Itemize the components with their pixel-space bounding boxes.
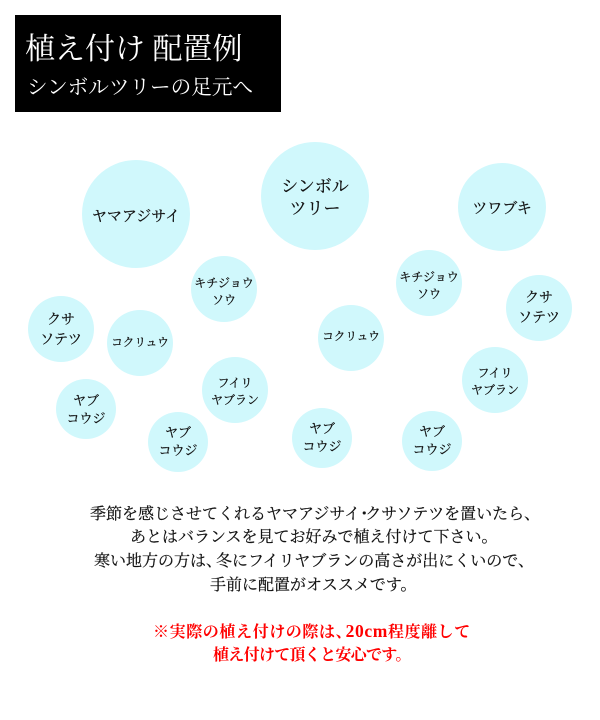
- circle: ヤブコウジ 2: ヤブ: [165, 425, 191, 440]
- heading: 植え付け 配置例: [25, 33, 242, 66]
- description text: 季節を感じさせてくれるヤマアジサイ・クサソテツを置いたら、: [90, 506, 540, 523]
- circle: フイリヤブラン right: フイリ: [478, 366, 512, 380]
- circle: コクリュウ center: [318, 305, 384, 371]
- warning note: 植え付けて頂くと安心です。: [213, 647, 411, 664]
- title block: [15, 15, 281, 112]
- circle: ヤマアジサイ: [82, 160, 190, 268]
- warning note: ※実際の植え付けの際は、20cm程度離して: [153, 621, 471, 641]
- warning note: [153, 621, 471, 664]
- description text: 寒い地方の方は、冬にフイリヤブランの高さが出にくいので、: [94, 553, 534, 570]
- circle: ツワブキ: [458, 163, 546, 251]
- circle: クサソテツ right: ソテツ: [518, 311, 560, 326]
- circle: ヤブコウジ 2: コウジ: [158, 443, 198, 458]
- circle: ヤブコウジ 3: ヤブ: [309, 421, 335, 436]
- description text: あとはバランスを見てお好みで植え付けて下さい。: [130, 529, 498, 546]
- planting layout diagram: [28, 142, 572, 472]
- circle: ヤブコウジ 2: [148, 412, 208, 472]
- circle: フイリヤブラン left: ヤブラン: [211, 392, 259, 406]
- description text: 手前に配置がオススメです。: [210, 577, 417, 594]
- circle: クサソテツ left: [28, 296, 94, 362]
- circle: キチジョウソウ left: キチジョウ: [194, 276, 254, 290]
- circle: ヤブコウジ 1: [56, 379, 116, 439]
- circle: ヤブコウジ 4: ヤブ: [419, 424, 445, 439]
- circle: ツワブキ: ツワブキ: [472, 201, 532, 217]
- circle: フイリヤブラン left: フイリ: [218, 376, 252, 390]
- circle: ヤブコウジ 3: [292, 408, 352, 468]
- circle: クサソテツ right: [506, 275, 572, 341]
- circle: ヤマアジサイ: ヤマアジサイ: [92, 209, 180, 225]
- description text: [90, 505, 540, 594]
- circle: コクリュウ center: コクリュウ: [322, 330, 380, 343]
- circle: クサソテツ left: クサ: [47, 313, 75, 328]
- circle: キチジョウソウ right: [396, 250, 462, 316]
- circle: キチジョウソウ right: キチジョウ: [399, 270, 459, 284]
- circle: ヤブコウジ 4: コウジ: [412, 442, 452, 457]
- circle: フイリヤブラン left: [202, 357, 268, 423]
- circle: キチジョウソウ left: [191, 256, 257, 322]
- circle: キチジョウソウ right: ソウ: [417, 287, 441, 301]
- circle: ヤブコウジ 1: コウジ: [66, 411, 106, 426]
- circle: ヤブコウジ 4: [402, 411, 462, 471]
- circle: クサソテツ left: ソテツ: [40, 333, 82, 348]
- circle: キチジョウソウ left: ソウ: [212, 293, 236, 307]
- circle: ヤブコウジ 1: ヤブ: [73, 393, 99, 408]
- circle: シンボルツリー: ツリー: [289, 199, 340, 218]
- circle: クサソテツ right: クサ: [525, 291, 553, 306]
- circle: フイリヤブラン right: ヤブラン: [471, 383, 519, 397]
- circle: ヤブコウジ 3: コウジ: [302, 439, 342, 454]
- circle: シンボルツリー: [261, 142, 369, 250]
- circle: コクリュウ left: [107, 310, 173, 376]
- subheading: シンボルツリーの足元へ: [27, 77, 253, 99]
- circle: シンボルツリー: シンボル: [281, 177, 349, 196]
- circle: フイリヤブラン right: [462, 347, 528, 413]
- circle: コクリュウ left: コクリュウ: [111, 336, 169, 348]
